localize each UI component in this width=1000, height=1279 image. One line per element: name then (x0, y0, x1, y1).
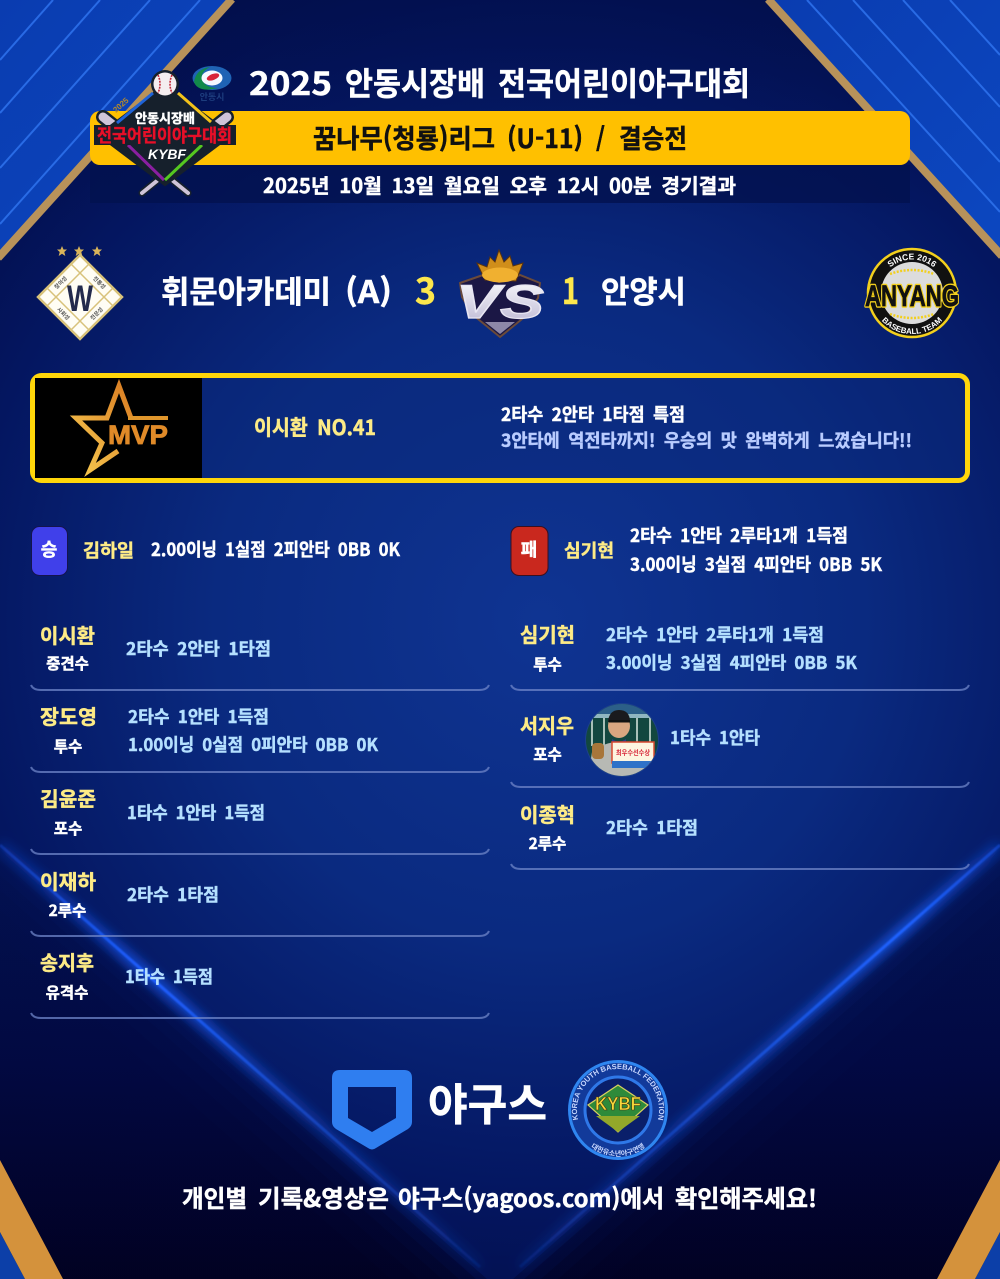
date text: 2025년 10월 13일 월요일 오후 12시 00분 경기결과 (263, 170, 736, 199)
header (90, 59, 910, 203)
icon: tournament logo: 2025 (111, 96, 131, 114)
row: 심기현: 2타수 1안타 2루타1개 1득점 (606, 622, 824, 647)
loser stats: 2타수 1안타 2루타1개 1득점 (630, 522, 848, 548)
team name: home: 휘문아카데미 (161, 267, 331, 312)
icon: MVP star: MVP (108, 420, 168, 450)
league title: (U-11) (507, 119, 583, 156)
row: 송지후: 1타수 1득점 (125, 964, 213, 989)
row: 장도영: 투수 (54, 735, 82, 757)
badge: loss: 패 (521, 536, 537, 562)
loser stats (630, 522, 883, 577)
icon: KYBF federation logo: KOREA YOUTH BASEBALL FEDERATION (572, 1064, 664, 1120)
icon: VS emblem (456, 250, 544, 337)
MVP stats: 2타수 2안타 1타점 특점 (501, 401, 685, 427)
icon: Whimoon team logo: 전문성 (88, 305, 105, 322)
row: 이시환 (31, 620, 489, 690)
icon: Anyang team logo: BASEBALL TEAM (882, 316, 942, 334)
panel: home team batters (31, 620, 489, 1018)
row: 김윤준: 포수 (54, 817, 82, 839)
icon: Anyang team logo: ANYANG (865, 280, 959, 313)
team name: away: 안양시 (601, 267, 686, 312)
player photo (585, 703, 660, 778)
score: away: 1 (562, 263, 579, 315)
icon: Anyang team logo: SINCE 2016 (888, 254, 936, 267)
row: 장도영: 2타수 1안타 1득점 (128, 704, 269, 729)
icon: tournament logo: 안동시장배 (135, 108, 195, 127)
row: 장도영 (31, 701, 489, 772)
row: 이종혁: 이종혁 (520, 799, 575, 828)
row: 심기현: 투수 (533, 653, 562, 675)
league bar (90, 111, 910, 165)
footer message: 개인별 (182, 1179, 247, 1214)
league title: / (596, 119, 605, 156)
corner: bottom left (0, 1160, 63, 1279)
league title: 결승전 (619, 119, 687, 156)
row: 심기현: 심기현 (520, 619, 575, 648)
badge: win: 승 (41, 536, 57, 562)
row: 김윤준: 김윤준 (40, 783, 96, 812)
corner: bottom right (937, 1160, 1000, 1279)
footer message (182, 1179, 817, 1214)
badge: loss (511, 526, 548, 576)
icon: KYBF federation logo (568, 1060, 668, 1160)
row: 서지우: 포수 (533, 743, 562, 765)
MVP frame (32, 376, 968, 480)
icon: KYBF federation logo: 대한유소년야구연맹 (592, 1142, 644, 1157)
loser name: 심기현 (564, 537, 614, 563)
row: 장도영: 1.00이닝 0실점 0피안타 0BB 0K (128, 732, 379, 757)
icon: Anyang team logo: ANYANG (865, 280, 959, 313)
match up (36, 246, 959, 341)
footer (182, 1060, 817, 1214)
row: 송지후: 유격수 (46, 981, 88, 1003)
footer message: 기록&영상은 (258, 1179, 389, 1214)
team name: home: (A) (345, 267, 392, 312)
glow line: right (520, 845, 1000, 1267)
icon: Whimoon team logo (38, 246, 122, 339)
title (249, 59, 750, 105)
icon: Whimoon team logo: W (67, 278, 93, 319)
row: 장도영: 장도영 (40, 701, 97, 730)
icon: Whimoon team logo: 창의성 (52, 274, 69, 291)
player photo: 최우수선수상 (616, 748, 650, 758)
MVP comment: 3안타에 역전타까지! 우승의 맛 완벽하게 느꼈습니다!! (501, 427, 912, 453)
winner name: 김하일 (83, 537, 134, 563)
row: 이재하: 2루수 (49, 899, 86, 921)
row: 서지우: 서지우 (520, 710, 574, 739)
icon: tournament logo (94, 70, 236, 193)
row: 이재하: 이재하 (40, 866, 96, 895)
row: 이종혁 (511, 799, 969, 869)
icon: tournament logo: 전국어린이야구대회 (97, 122, 232, 148)
icon: Anyang team logo (864, 248, 959, 338)
icon: Whimoon team logo: 사회성 (55, 305, 72, 322)
icon: Yagoos home plate logo (332, 1070, 412, 1150)
glow line: left (0, 845, 480, 1267)
row: 이시환: 이시환 (40, 620, 95, 649)
row: 서지우: 1타수 1안타 (670, 725, 760, 750)
icon: VS emblem: VS (456, 275, 544, 328)
row: 심기현 (511, 619, 969, 690)
row: 송지후 (31, 947, 489, 1018)
row: 이종혁: 2루수 (529, 832, 566, 854)
row: 심기현: 3.00이닝 3실점 4피안타 0BB 5K (606, 650, 858, 675)
icon: Andong city logo: 안동시 (200, 90, 224, 103)
title: 안동시장배 (345, 59, 485, 105)
row: 이시환: 중견수 (46, 652, 89, 674)
Yagoos wordmark: 야구스 (428, 1069, 547, 1133)
loser stats: 3.00이닝 3실점 4피안타 0BB 5K (630, 551, 883, 577)
icon: tournament logo: KYBF (148, 146, 186, 162)
icon: KYBF federation logo: KYBF (595, 1094, 641, 1114)
row: 이시환: 2타수 2안타 1타점 (126, 636, 271, 661)
panel: losing pitcher (511, 522, 883, 577)
icon: Andong city logo (192, 66, 232, 103)
date bar (90, 165, 910, 203)
corner: top right (768, 0, 1000, 256)
badge: win (32, 526, 68, 576)
MVP player name: 이시환 NO.41 (254, 412, 376, 442)
row: 이재하 (31, 866, 489, 936)
icon: Whimoon team logo: 전통성 (91, 274, 108, 291)
icon: MVP star (35, 378, 202, 478)
row: 이종혁: 2타수 1타점 (606, 815, 698, 840)
row: 서지우 (511, 703, 969, 787)
score: home: 3 (415, 263, 436, 315)
footer message: 확인해주세요! (675, 1179, 817, 1214)
panel: winning pitcher (32, 526, 401, 576)
winner stats: 2.00이닝 1실점 2피안타 0BB 0K (151, 536, 401, 562)
row: 송지후: 송지후 (40, 947, 94, 976)
panel: away team batters (511, 619, 969, 869)
corner: top left (0, 0, 232, 258)
league title: 꿈나무(청룡)리그 (313, 119, 495, 156)
row: 김윤준 (31, 783, 489, 854)
league title (313, 119, 687, 156)
title: 2025 (249, 59, 332, 105)
panel: MVP (32, 376, 968, 480)
title: 전국어린이야구대회 (498, 59, 750, 105)
row: 이재하: 2타수 1타점 (127, 882, 219, 907)
row: 김윤준: 1타수 1안타 1득점 (127, 800, 265, 825)
footer message: 야구스(yagoos.com)에서 (398, 1179, 664, 1214)
